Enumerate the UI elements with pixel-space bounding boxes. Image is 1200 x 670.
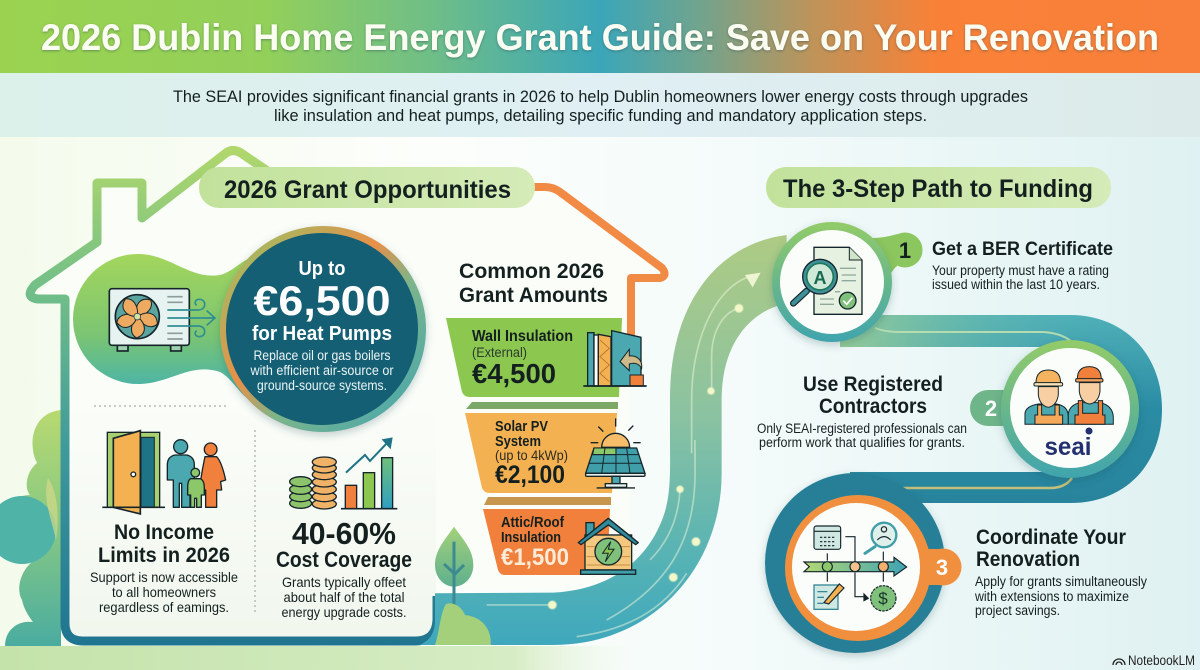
page background (0, 137, 1200, 670)
funnel: solar pv: (up to 4kWp) (495, 447, 568, 463)
badge 2: 2 (985, 396, 997, 421)
step 2: registered contractors: Only SEAI-registered professionals can (757, 421, 967, 436)
grant amounts heading: Grant Amounts (459, 283, 608, 307)
heat pump grant circle (220, 226, 426, 432)
funnel: solar pv: System (495, 434, 541, 450)
step 1 circle (772, 222, 892, 342)
heat pump feature (73, 226, 426, 432)
house green outline (30, 150, 285, 622)
summary text: The SEAI provides significant financial grants in 2026 to help Dublin homeowners lower energy costs through upgrades (173, 88, 1028, 106)
icon: solar panel and sun (586, 418, 645, 488)
coverage description: Grants typically offeet (282, 574, 406, 590)
step 3: coordinate renovation: project savings. (975, 603, 1060, 618)
step 3: coordinate renovation: Renovation (976, 548, 1080, 571)
no income limits block: Limits in 2026 (98, 544, 230, 567)
step 3: coordinate renovation (765, 473, 1147, 653)
step 3 text: Coordinate Your (976, 526, 1126, 549)
winding road to step one (420, 235, 787, 645)
coverage figure: 40-60% (292, 516, 396, 551)
icon: air source heat pump (109, 289, 215, 351)
heat pump grant circle: €6,500 (254, 277, 390, 324)
funnel: wall insulation (446, 318, 647, 409)
icon: open door and family (102, 431, 226, 514)
SEAI logo: seai (1044, 433, 1092, 461)
no income heading: No Income (114, 521, 214, 544)
section heading: grant opportunities (199, 167, 535, 208)
step 3: coordinate renovation: Apply for grants simultaneously (975, 574, 1147, 589)
badge 1: 1 (899, 238, 911, 263)
heat pump grant circle: Up to (298, 258, 346, 280)
cost coverage block: about half of the total (284, 589, 404, 605)
summary band (0, 73, 1200, 137)
funnel: wall insulation: Wall Insulation (472, 328, 573, 345)
cost coverage block: energy upgrade costs. (282, 604, 406, 620)
cost coverage block (276, 437, 412, 620)
funnel: solar pv: Solar PV (495, 419, 548, 435)
icon: coins and rising bars (290, 437, 397, 509)
cost coverage block: Cost Coverage (276, 547, 412, 572)
step 1 text: Get a BER Certificate (932, 239, 1113, 260)
step 1: BER certificate: Your property must have a rating (932, 263, 1109, 278)
no income description: Support is now accessible (90, 569, 238, 585)
icon: insulated house with energy bolt (578, 518, 638, 574)
house base (65, 596, 437, 641)
section heading: 3-step path: The 3-Step Path to Funding (783, 175, 1093, 203)
badge 1 (872, 232, 922, 288)
ground band (0, 646, 640, 670)
summary band: like insulation and heat pumps, detailing specific funding and mandatory application steps. (274, 107, 927, 125)
certificate rating letter: A (814, 268, 826, 288)
no income limits block (90, 431, 238, 615)
left decorative bushes (0, 410, 61, 646)
step 2 text: Use Registered (803, 373, 943, 396)
connector path between steps (840, 315, 1162, 503)
grant amounts heading (459, 259, 608, 307)
funnel: attic and roof insulation (483, 509, 638, 575)
icon: renovation timeline (804, 523, 907, 611)
step 3 outer disc (765, 473, 945, 653)
step 2: registered contractors (757, 340, 1139, 478)
house orange roof (530, 187, 665, 340)
step 3 ring (785, 495, 931, 641)
step 3: coordinate renovation: with extensions to maximize (974, 589, 1129, 604)
grant amounts heading: Common 2026 (459, 259, 604, 283)
no income limits block: regardless of eamings. (99, 599, 229, 615)
heat pump grant circle: ground-source systems. (257, 378, 387, 393)
header banner (0, 0, 1200, 73)
title: 2026 Dublin Home Energy Grant Guide: Save on Your Renovation (41, 17, 1159, 58)
section heading: grant opportunities: 2026 Grant Opportunities (224, 176, 511, 204)
tree and bush (435, 527, 491, 645)
funnel: solar pv: €2,100 (495, 461, 565, 489)
heat pump grant circle: for Heat Pumps (252, 323, 392, 345)
funnel: attic and roof insulation: Attic/Roof (501, 515, 564, 531)
funnel: solar pv (465, 413, 645, 505)
badge 3 (920, 548, 962, 586)
step 2 circle (1001, 340, 1139, 478)
step 1: BER certificate: issued within the last 10 years. (932, 277, 1100, 292)
grant dollar seal: $ (878, 589, 888, 608)
step 2: registered contractors: Contractors (819, 395, 927, 418)
funnel: attic and roof insulation: €1,500 (501, 544, 569, 571)
funnel: attic and roof insulation: Insulation (501, 530, 561, 546)
step 2: registered contractors: perform work that qualifies for grants. (759, 435, 965, 450)
icon: two contractors in hard hats (1025, 367, 1113, 424)
badge 3: 3 (936, 555, 948, 580)
no income limits block: to all homeowners (112, 584, 216, 600)
step 1: BER certificate (772, 222, 1113, 342)
funnel: wall insulation: (External) (472, 344, 527, 360)
section heading: 3-step path (766, 167, 1111, 208)
icon: BER certificate and magnifier (793, 247, 862, 314)
badge 2 (970, 390, 1012, 426)
funnel: wall insulation: €4,500 (472, 358, 556, 389)
icon: wall insulation layers (583, 331, 647, 386)
connector blob (73, 254, 250, 400)
house outline panel (30, 150, 665, 641)
heat pump grant circle: Replace oil or gas boilers (254, 348, 391, 363)
heat pump grant circle: with efficient air-source or (250, 363, 394, 378)
